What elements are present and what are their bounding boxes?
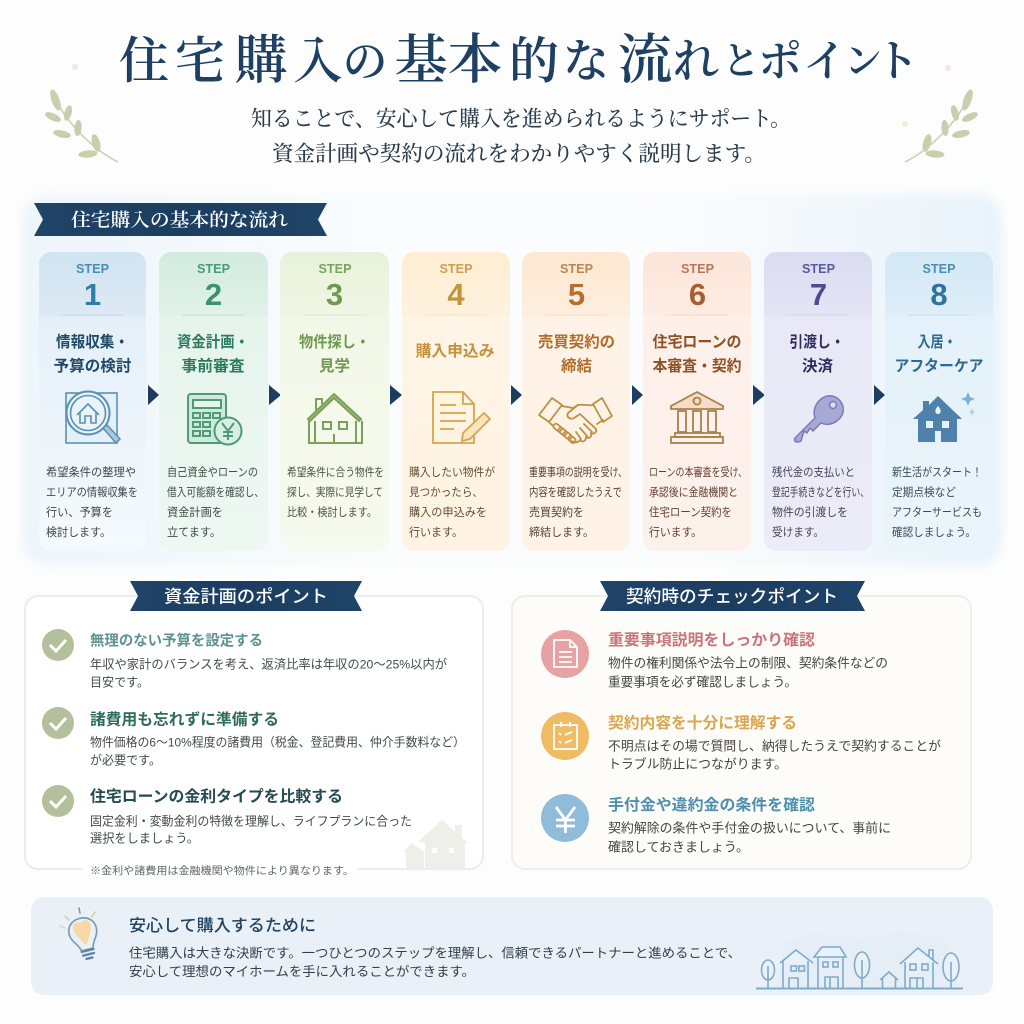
title: ン (844, 41, 882, 83)
point 2: 諸費用も忘れずに準備する (90, 710, 279, 728)
checkpoint 3: 確認しておきましょう。 (608, 840, 749, 854)
arrow 6 to 7 (753, 385, 765, 405)
step 2 card: 2 (205, 277, 222, 312)
title: 基 (394, 32, 448, 90)
point 3 (42, 785, 412, 846)
decoration: left olive sprig (44, 88, 118, 162)
title: な (563, 36, 609, 87)
description: 承認後に金融機関と (649, 485, 738, 499)
title: ト (875, 37, 919, 86)
step 7 card: STEP (802, 262, 835, 276)
description (772, 465, 869, 539)
checkpoint 2: 契約内容を十分に理解する (608, 713, 797, 732)
title: と (722, 41, 760, 83)
step 5 card: 5 (568, 277, 585, 312)
point 3: 住宅ローンの金利タイプを比較する (90, 786, 343, 806)
description: 定期点検など (892, 485, 957, 499)
description: 受けます。 (772, 526, 824, 539)
description: 重要事項の説明を受け、 (529, 465, 627, 479)
title: 入 (293, 33, 343, 89)
footnote: ※金利や諸費用は金融機関や物件により異なります。 (90, 864, 354, 877)
panel: funding points (25, 581, 483, 877)
step 8 card: 入居・ (918, 334, 956, 351)
step 3 card: 見学 (319, 356, 350, 375)
point 2: 物件価格の6～10%程度の諸費用（税金、登記費用、仲介手数料など） (90, 734, 465, 750)
description: 登記手続きなどを行い、 (772, 485, 869, 499)
arrow 1 to 2 (148, 385, 159, 405)
ribbon: contract checkpoints (600, 581, 865, 611)
title: れ (673, 36, 719, 87)
closing body: 住宅購入は大きな決断です。一つひとつのステップを理解し、信頼できるパートナーと進めることで、 (129, 946, 741, 960)
description: 物件の引渡しを (772, 505, 848, 519)
description: 新生活がスタート！ (892, 465, 982, 479)
title: 流 (618, 30, 672, 90)
panel: contract checkpoints (512, 581, 971, 869)
decoration: right olive sprig (905, 88, 979, 162)
description: 見つかったら、 (409, 486, 483, 499)
step 6 card: STEP (681, 262, 714, 276)
description: 自己資金やローンの (167, 466, 258, 479)
description: 残代金の支払いと (772, 465, 855, 479)
icon: key (794, 396, 843, 442)
ribbon: funding points (130, 581, 362, 611)
step 1 card: 情報収集・ (56, 332, 129, 351)
step 7 card (764, 252, 872, 551)
icon: house with sparkle (913, 392, 975, 442)
step 2 card: 事前審査 (182, 356, 245, 375)
description: 売買契約を (529, 505, 584, 519)
description: 立てます。 (167, 525, 221, 539)
step 4 card: 購入申込み (416, 342, 494, 360)
checkpoint 1: 重要事項を必ず確認しましょう。 (608, 674, 797, 690)
arrow 5 to 6 (632, 385, 643, 405)
panel: closing message (31, 897, 993, 995)
title: 宅 (175, 33, 225, 89)
section banner: basic flow: 住宅購入の基本的な流れ (71, 210, 289, 232)
description: 比較・検討します。 (287, 505, 377, 519)
point 1 (42, 629, 447, 690)
icon: light bulb (60, 908, 103, 962)
description (892, 465, 982, 539)
checkpoint 2: 不明点はその場で質問し、納得したうえで契約することが (608, 738, 941, 754)
description: 希望条件に合う物件を (287, 465, 384, 479)
description: ローンの本審査を受け、 (649, 465, 747, 479)
step 7 card: 決済 (802, 357, 833, 375)
point 2: が必要です。 (90, 752, 161, 768)
illustration: houses and trees (756, 932, 963, 988)
point 3: 固定金利・変動金利の特徴を理解し、ライフプランに合った (90, 814, 412, 828)
closing body (129, 946, 741, 979)
step 1 card: STEP (76, 262, 109, 276)
description: 行います。 (649, 526, 702, 539)
step 8 card: 8 (930, 277, 948, 312)
subtitle: 知ることで、安心して購入を進められるようにサポート。 (251, 107, 791, 131)
closing heading: 安心して購入するために (129, 916, 316, 935)
description (649, 465, 747, 539)
description: 検討します。 (46, 525, 111, 539)
checkpoint 2 (541, 712, 941, 772)
subtitle (251, 107, 791, 166)
title: ポ (758, 37, 802, 86)
note gap (82, 864, 358, 876)
description: 借入可能額を確認し、 (167, 485, 264, 499)
description: 住宅ローン契約を (649, 505, 732, 519)
description: 行い、予算を (46, 505, 113, 519)
section banner: basic flow (34, 203, 327, 236)
step 4 card: STEP (440, 262, 472, 276)
step 8 card: アフターケア (894, 357, 984, 375)
description (287, 465, 384, 519)
description: 探し、実際に見学して (287, 485, 383, 499)
checkpoint 3: 契約解除の条件や手付金の扱いについて、事前に (608, 820, 891, 836)
description: 希望条件の整理や (46, 465, 136, 479)
description: 行います。 (409, 526, 463, 539)
step 2 card: STEP (197, 262, 230, 276)
icon: calculator and yen (188, 394, 242, 444)
point 3: 選択をしましょう。 (90, 832, 199, 846)
description: 締結します。 (529, 525, 594, 539)
title: の (342, 37, 388, 87)
step 3 card: 3 (326, 277, 343, 312)
description: 内容を確認したうえで (529, 485, 622, 499)
description (46, 465, 138, 539)
step 5 card (522, 252, 630, 551)
description: 購入したい物件が (409, 465, 496, 479)
description: 確認しましょう。 (892, 525, 976, 539)
description (409, 465, 496, 539)
step 5 card: 売買契約の (538, 332, 615, 351)
step 5 card: 締結 (561, 356, 592, 375)
checkpoint 1: 重要事項説明をしっかり確認 (608, 630, 815, 649)
checkpoint 3 (541, 794, 891, 854)
checkpoint 2: トラブル防止につながります。 (608, 756, 787, 772)
description (167, 466, 264, 539)
checkpoint 1 (541, 630, 888, 690)
watermark house (403, 820, 468, 868)
step 4 card: 4 (447, 277, 465, 312)
step 3 card (280, 252, 389, 551)
arrow 2 to 3 (269, 385, 281, 405)
description: エリアの情報収集を (46, 485, 138, 499)
description: 資金計画を (167, 505, 223, 519)
title: 購 (234, 32, 288, 90)
step 6 card: 6 (689, 277, 706, 312)
panel: basic flow background (22, 194, 1002, 566)
step 4 card (402, 252, 510, 551)
description: 購入の申込みを (409, 505, 487, 519)
icon: document and pencil (433, 392, 490, 443)
step 7 card: 引渡し・ (790, 333, 844, 351)
title: 的 (509, 33, 559, 89)
step 1 card (39, 252, 146, 551)
step 1 card: 1 (84, 277, 101, 312)
point 1: 年収や家計のバランスを考え、返済比率は年収の20～25%以内が (90, 656, 447, 672)
step 7 card: 7 (810, 277, 827, 312)
arrow 7 to 8 (874, 385, 885, 405)
arrow 4 to 5 (511, 385, 522, 405)
step 2 card: 資金計画・ (177, 332, 249, 351)
icon: bank building (671, 392, 723, 443)
ribbon: contract checkpoints: 契約時のチェックポイント (626, 586, 838, 606)
step 6 card: 本審査・契約 (652, 356, 742, 375)
step 1 card: 予算の検討 (54, 356, 132, 375)
description (529, 465, 627, 539)
arrow 3 to 4 (390, 385, 402, 405)
title: イ (803, 37, 847, 86)
step 3 card: 物件探し・ (299, 333, 370, 351)
step 6 card: 住宅ローンの (652, 332, 742, 351)
step 5 card: STEP (560, 262, 593, 276)
point 1: 目安です。 (90, 676, 149, 690)
checkpoint 3: 手付金や違約金の条件を確認 (608, 795, 815, 814)
point 2 (42, 707, 465, 768)
step 8 card (885, 252, 993, 551)
step 8 card: STEP (922, 262, 956, 276)
title: 本 (448, 30, 502, 90)
description: アフターサービスも (892, 506, 982, 519)
decoration: pale dots (72, 64, 951, 127)
checkpoint 1: 物件の権利関係や法令上の制限、契約条件などの (608, 656, 888, 670)
step 3 card: STEP (318, 262, 352, 276)
step 2 card (159, 252, 268, 551)
point 1: 無理のない予算を設定する (90, 632, 263, 650)
icon: handshake (539, 398, 612, 444)
closing body: 安心して理想のマイホームを手に入れることができます。 (129, 964, 475, 979)
title: 住 (119, 33, 169, 89)
step 6 card (643, 252, 751, 551)
subtitle: 資金計画や契約の流れをわかりやすく説明します。 (272, 142, 766, 166)
icon: house (308, 394, 362, 443)
ribbon: funding points: 資金計画のポイント (164, 586, 328, 606)
icon: magnifier over house (66, 392, 120, 443)
